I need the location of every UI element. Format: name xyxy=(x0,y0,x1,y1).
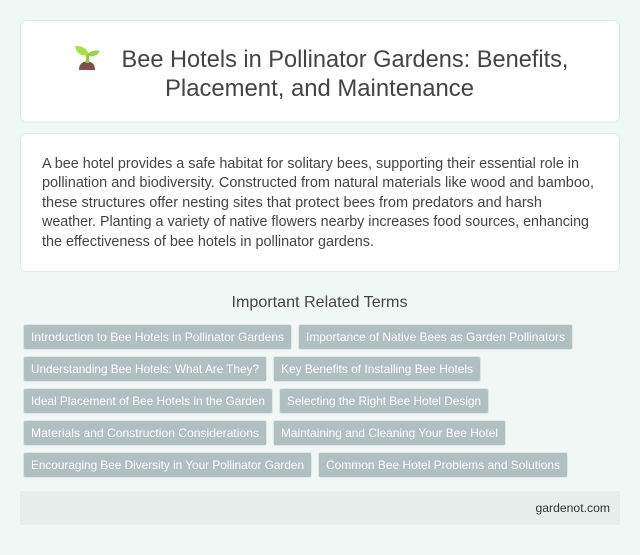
tag: diversity: Encouraging Bee Diversity in Your Pollinator Garden xyxy=(31,458,304,472)
title: Placement, and Maintenance xyxy=(165,75,474,102)
tag: problems xyxy=(318,452,568,478)
heading: important related terms: Important Related Terms xyxy=(232,294,408,311)
footer text: gardenot.com xyxy=(536,501,610,515)
tag: introduction: Introduction to Bee Hotels in Pollinator Gardens xyxy=(31,330,284,344)
tag: materials: Materials and Construction Considerations xyxy=(31,426,259,440)
tag: native bees xyxy=(298,324,572,350)
tag: materials xyxy=(24,420,266,446)
panel: tag list xyxy=(24,324,572,478)
tag: key benefits: Key Benefits of Installing Bee Hotels xyxy=(281,362,473,376)
tag: native bees: Importance of Native Bees as Garden Pollinators xyxy=(306,330,565,344)
text block: intro paragraph: weather. Planting a variety of native flowers nearby increases food sources, enhancing xyxy=(41,214,589,230)
icon: seedling xyxy=(75,46,100,70)
tag: introduction xyxy=(24,324,292,350)
panel: intro text card xyxy=(20,134,620,272)
tag: maintaining xyxy=(274,420,506,446)
footer bar xyxy=(20,491,620,525)
panel: title card xyxy=(20,20,620,122)
text block: intro paragraph xyxy=(41,156,594,250)
title xyxy=(122,46,568,102)
text block: intro paragraph: these structures offer nesting sites that protect bees from predators and harsh xyxy=(42,195,542,211)
text block: intro paragraph: pollination and biodiversity. Constructed from natural materials like wood and bamboo, xyxy=(42,175,594,191)
title: Bee Hotels in Pollinator Gardens: Benefits, xyxy=(122,46,568,73)
tag: ideal placement xyxy=(24,388,272,414)
tag: ideal placement: Ideal Placement of Bee Hotels in the Garden xyxy=(31,394,265,408)
text block: intro paragraph: the effectiveness of bee hotels in pollinator gardens. xyxy=(42,234,374,250)
tag: understanding: Understanding Bee Hotels: What Are They? xyxy=(31,362,259,376)
text block: intro paragraph: A bee hotel provides a safe habitat for solitary bees, supporting their essential role in xyxy=(42,156,579,172)
tag: key benefits xyxy=(274,356,480,382)
tag: selecting design: Selecting the Right Bee Hotel Design xyxy=(287,394,481,408)
tag: selecting design xyxy=(280,388,488,414)
tag: understanding xyxy=(24,356,266,382)
tag: problems: Common Bee Hotel Problems and Solutions xyxy=(326,458,560,472)
tag: diversity xyxy=(24,452,312,478)
tag: maintaining: Maintaining and Cleaning Your Bee Hotel xyxy=(281,426,498,440)
